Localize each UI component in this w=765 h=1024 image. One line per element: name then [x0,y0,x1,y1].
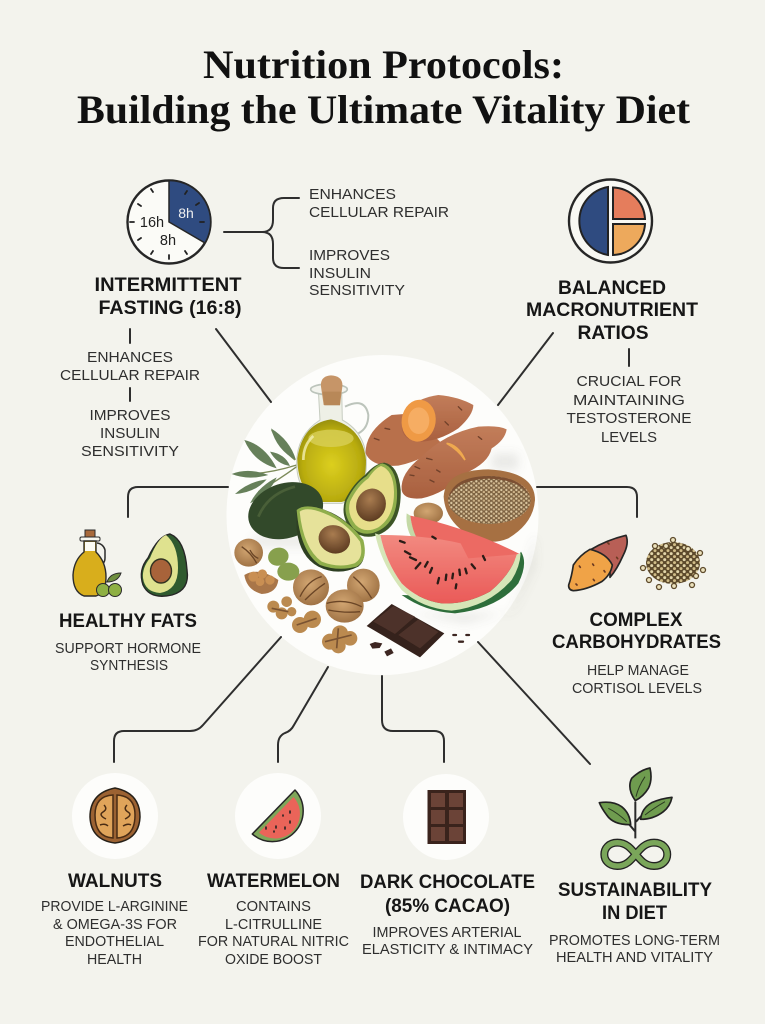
heading: balanced macronutrient ratios: MACRONUTRIENT [526,299,698,321]
heading: intermittent fasting: FASTING (16:8) [98,297,242,319]
text: walnuts description: & OMEGA-3S FOR [53,917,177,933]
avocado half right [343,463,401,537]
heading: sustainability: SUSTAINABILITY [558,879,712,901]
heading: watermelon: WATERMELON [207,870,340,892]
text: fasting benefits below: IMPROVES [90,408,171,424]
chocolate bar [367,604,469,657]
text: fasting benefits right: SENSITIVITY [309,283,405,299]
text: chocolate description: ELASTICITY & INTIMACY [362,942,533,958]
text: walnuts description: PROVIDE L-ARGININE [41,899,188,915]
text: fasting benefits right: ENHANCES [309,187,396,203]
icon: macronutrient pie [569,180,652,262]
heading: dark chocolate [360,871,535,917]
text: carbs description [572,663,702,697]
heading: dark chocolate: DARK CHOCOLATE [360,871,535,893]
watermelon back slice [406,513,520,583]
heading: complex carbohydrates: COMPLEX [590,609,682,631]
shadows [252,453,535,623]
text: watermelon description: FOR NATURAL NITRIC [198,934,349,950]
icon: walnut [72,773,158,859]
title: Nutrition Protocols: [203,42,564,87]
text: fasting benefits below [60,329,200,460]
icon: 16:8 fasting clock: 16h [140,215,164,231]
icon: watermelon [235,773,321,859]
text: chocolate description: IMPROVES ARTERIAL [372,925,522,941]
text: sustainability description: HEALTH AND VITALITY [556,950,713,966]
icon: olive oil and olives [73,530,122,596]
text: healthy fats description: SUPPORT HORMONE [55,641,201,657]
text: macronutrient benefit [566,349,692,446]
icon: sustainability sprout [599,768,672,866]
text: sustainability description: PROMOTES LONG-TERM [549,933,720,949]
heading: sustainability: IN DIET [602,902,667,924]
title: Building the Ultimate Vitality Diet [77,87,691,132]
text: walnuts description: HEALTH [87,952,142,968]
icon: chocolate bar [403,774,489,860]
text: fasting benefits below: CELLULAR REPAIR [60,368,200,384]
text: carbs description: HELP MANAGE [587,663,689,679]
text: watermelon description: CONTAINS [236,899,311,915]
heading: sustainability [558,879,712,924]
text: walnuts description: ENDOTHELIAL [65,934,164,950]
text: sustainability description [549,933,720,966]
heading: balanced macronutrient ratios: BALANCED [558,277,666,299]
olive branch [232,428,297,503]
heading: complex carbohydrates: CARBOHYDRATES [552,631,721,653]
brace connector [224,198,299,268]
heading: complex carbohydrates [552,609,721,653]
icon: 16:8 fasting clock [128,180,211,264]
whole avocado [241,473,331,549]
text: carbs description: CORTISOL LEVELS [572,681,702,697]
text: watermelon description: OXIDE BOOST [225,952,322,968]
text: walnuts description [41,899,188,968]
text: chocolate description [362,925,533,958]
heading: dark chocolate: (85% CACAO) [385,895,510,917]
walnuts and olives [234,539,380,653]
icon: quinoa grains [640,538,706,590]
heading: walnuts: WALNUTS [68,870,162,892]
whole walnut behind melon [414,503,443,524]
connector lines [114,329,637,764]
heading: intermittent fasting [94,274,242,319]
heading: balanced macronutrient ratios [526,277,698,344]
text: fasting benefits right [309,187,449,299]
olive oil bottle [297,375,368,503]
heading: healthy fats: HEALTHY FATS [59,610,197,632]
text: fasting benefits right: CELLULAR REPAIR [309,205,449,221]
text: macronutrient benefit: MAINTAINING [573,393,685,409]
text: fasting benefits below: SENSITIVITY [81,444,179,460]
text: macronutrient benefit: CRUCIAL FOR [576,374,682,390]
icon: avocado half [141,534,187,596]
title [77,42,691,132]
heading: intermittent fasting: INTERMITTENT [94,274,242,296]
text: macronutrient benefit: TESTOSTERONE [566,411,692,427]
text: healthy fats description [55,641,201,674]
watermelon front slice [375,533,524,613]
text: fasting benefits right: IMPROVES [309,248,390,264]
text: fasting benefits right: INSULIN [309,266,371,282]
icon: 16:8 fasting clock: 8h [178,205,194,221]
sweet potatoes [366,395,507,499]
text: watermelon description: L-CITRULLINE [225,917,322,933]
quinoa bowl [444,469,535,542]
central food illustration [226,355,538,675]
text: macronutrient benefit: LEVELS [601,430,657,446]
text: watermelon description [198,899,349,968]
icon: sweet potato [569,535,627,591]
text: healthy fats description: SYNTHESIS [90,658,168,674]
icon: 16:8 fasting clock: 8h [160,233,176,249]
text: fasting benefits below: ENHANCES [87,350,173,366]
heading: balanced macronutrient ratios: RATIOS [578,322,648,344]
text: fasting benefits below: INSULIN [100,426,160,442]
avocado half left [297,506,365,572]
